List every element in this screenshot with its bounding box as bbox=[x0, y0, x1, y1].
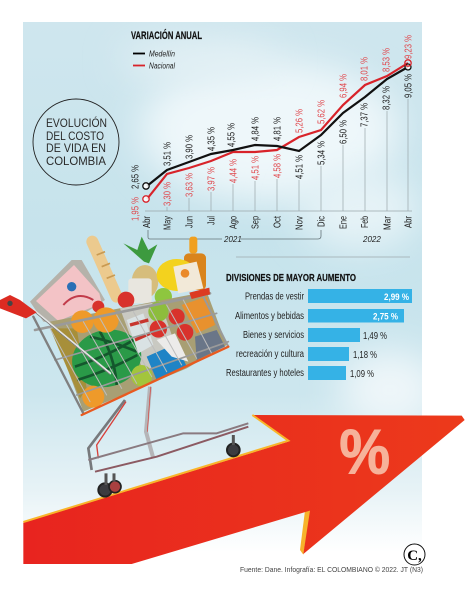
logo bbox=[404, 544, 425, 565]
Medellín values: 5,34 % bbox=[316, 141, 328, 165]
bar: recreación y cultura: recreación y cultura bbox=[236, 349, 304, 360]
legend: Nacional bbox=[149, 62, 175, 70]
Medellín values: 2,65 % bbox=[130, 165, 142, 189]
Nacional values: 8,01 % bbox=[358, 57, 370, 81]
month labels: Sep bbox=[250, 216, 262, 229]
bar: alimentos y bebidas bbox=[235, 309, 404, 322]
bar: recreación y cultura bbox=[236, 347, 377, 361]
bar: alimentos y bebidas: Alimentos y bebidas bbox=[235, 311, 304, 322]
month labels: Abr bbox=[142, 215, 153, 228]
Medellín values: 3,51 % bbox=[162, 142, 174, 166]
heading: variación anual: VARIACIÓN ANUAL bbox=[131, 29, 202, 42]
Nacional values: 3,30 % bbox=[162, 182, 174, 206]
year brackets: 2022 bbox=[362, 235, 381, 244]
cart wires bbox=[33, 293, 228, 415]
bar: restaurantes y hoteles: 1,09 % bbox=[350, 369, 374, 380]
bar: prendas de vestir: Prendas de vestir bbox=[245, 292, 304, 302]
bar: bienes y servicios bbox=[243, 328, 387, 342]
bar: bienes y servicios: Bienes y servicios bbox=[243, 330, 304, 341]
logo: C, bbox=[407, 548, 422, 564]
chart guide lines bbox=[145, 99, 412, 211]
circle: evolución del costo de vida bbox=[33, 99, 119, 185]
Medellín values: 9,05 % bbox=[402, 74, 414, 98]
Nacional values: 5,62 % bbox=[316, 100, 328, 124]
month labels: Dic bbox=[316, 216, 328, 227]
Medellín values bbox=[130, 74, 414, 189]
Nacional values: 8,53 % bbox=[380, 48, 392, 72]
Nacional values: 4,58 % bbox=[272, 154, 284, 178]
heading: divisiones de mayor aumento: DIVISIONES DE MAYOR AUMENTO bbox=[226, 272, 356, 284]
line: Nacional bbox=[147, 63, 408, 199]
Nacional values: 9,23 % bbox=[402, 35, 414, 59]
bar: bienes y servicios: 1,49 % bbox=[363, 331, 387, 342]
Medellín values: 4,84 % bbox=[250, 117, 262, 141]
month labels: Abr bbox=[404, 215, 414, 228]
Medellín values: 7,37 % bbox=[358, 103, 370, 127]
Nacional values bbox=[130, 35, 414, 221]
month labels: Ago bbox=[228, 216, 240, 229]
bar: prendas de vestir bbox=[245, 289, 412, 303]
Medellín values: 6,50 % bbox=[338, 120, 350, 144]
line chart bbox=[130, 35, 414, 244]
Nacional values: 5,26 % bbox=[294, 109, 306, 133]
bar: restaurantes y hoteles: Restaurantes y hoteles bbox=[226, 368, 304, 379]
arrow bbox=[23, 415, 465, 564]
month labels: Nov bbox=[294, 216, 306, 230]
circle: evolución del costo de vida: EVOLUCIÓN bbox=[46, 117, 107, 130]
Nacional values: 3,63 % bbox=[184, 173, 196, 197]
Nacional values: 1,95 % bbox=[130, 197, 142, 221]
legend bbox=[133, 50, 175, 70]
groceries bbox=[30, 237, 227, 412]
bar: prendas de vestir: 2,99 % bbox=[384, 292, 409, 303]
bar chart: divisiones bbox=[226, 289, 412, 380]
month labels: Feb bbox=[360, 216, 371, 228]
Nacional values: 4,51 % bbox=[250, 156, 262, 180]
bar: recreación y cultura: 1,18 % bbox=[353, 350, 377, 361]
month labels: May bbox=[162, 216, 174, 230]
Nacional values: 6,94 % bbox=[338, 74, 350, 98]
cart handle bbox=[0, 288, 210, 318]
cart chassis and wheels bbox=[88, 387, 248, 497]
legend: Medellín bbox=[149, 50, 175, 58]
shopping cart bbox=[0, 237, 248, 497]
Medellín values: 3,90 % bbox=[184, 135, 196, 159]
circle: evolución del costo de vida: COLOMBIA bbox=[46, 156, 106, 168]
bar: restaurantes y hoteles bbox=[226, 366, 374, 380]
Medellín values: 4,51 % bbox=[294, 155, 306, 179]
line: Medellín bbox=[147, 67, 408, 186]
month labels: Ene bbox=[338, 216, 350, 229]
year brackets: 2021 bbox=[223, 235, 242, 244]
month labels: Jul bbox=[206, 216, 218, 225]
month labels: Oct bbox=[272, 216, 284, 228]
start and end markers bbox=[143, 60, 411, 202]
circle: evolución del costo de vida: DE VIDA EN bbox=[46, 143, 106, 155]
source text: Fuente: Dane. Infografía: EL COLOMBIANO © 2022. JT (N3) bbox=[240, 565, 423, 574]
Nacional values: 3,97 % bbox=[206, 167, 218, 191]
Medellín values: 4,81 % bbox=[272, 117, 284, 141]
percent sign: % bbox=[339, 417, 390, 487]
Medellín values: 8,32 % bbox=[380, 86, 392, 110]
month labels bbox=[142, 215, 414, 230]
month labels: Mar bbox=[382, 215, 394, 230]
sky background panel bbox=[23, 22, 440, 552]
Medellín values: 4,35 % bbox=[206, 127, 218, 151]
Nacional values: 4,44 % bbox=[228, 159, 240, 183]
month labels: Jun bbox=[184, 216, 196, 228]
year brackets bbox=[148, 230, 381, 244]
bar: alimentos y bebidas: 2,75 % bbox=[373, 312, 398, 322]
circle: evolución del costo de vida: DEL COSTO bbox=[46, 131, 104, 143]
Medellín values: 4,55 % bbox=[226, 123, 238, 147]
